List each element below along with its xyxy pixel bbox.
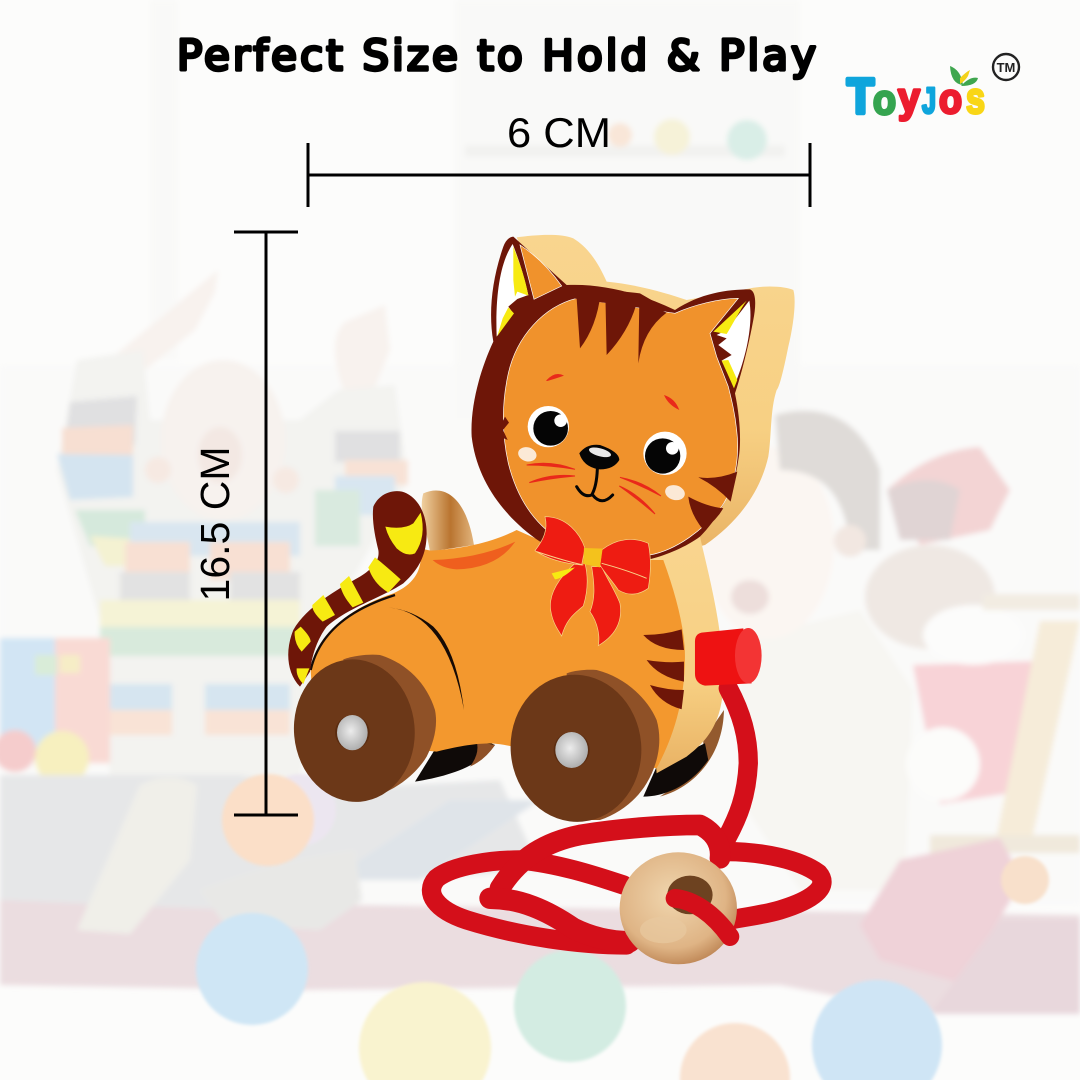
balls — [196, 774, 1049, 1080]
tail — [288, 491, 427, 687]
right ear — [717, 301, 750, 387]
brows — [546, 374, 564, 381]
red peg — [695, 628, 762, 686]
side stripes — [643, 629, 684, 709]
red cord — [431, 688, 822, 945]
nose and mouth — [577, 445, 619, 501]
cheek dots — [517, 445, 538, 463]
head — [471, 237, 755, 559]
dark head outline — [471, 237, 755, 559]
lower body details, bow, tail, wheels — [288, 491, 684, 827]
right cheek stripes — [698, 472, 737, 502]
height dimension: 16.5 CM: 16.5 CM — [192, 447, 238, 601]
width dimension: 6 CM: 6 CM — [507, 109, 611, 156]
trademark badge — [993, 54, 1019, 80]
far wheels and hump behind body — [415, 491, 724, 797]
height dimension: 16.5 CM — [192, 232, 298, 815]
trademark badge: TM — [997, 60, 1015, 75]
wooden bead on cord — [620, 852, 737, 964]
plush toys and wooden frame — [865, 447, 1080, 853]
toy: wooden cat pull-along — [288, 235, 822, 964]
eyes — [528, 406, 687, 475]
logo: Toyjos: s — [966, 74, 985, 123]
logo: Toyjos: o — [939, 75, 962, 122]
cream wood back of cat — [517, 235, 795, 557]
sweater sleeves and torso — [57, 350, 408, 780]
width dimension: 6 CM — [308, 109, 810, 207]
front wheel — [504, 669, 659, 827]
left cheek marks — [500, 417, 509, 440]
legs and carpet — [0, 775, 1080, 1014]
back mark — [433, 542, 515, 569]
logo: Toyjos: T — [847, 70, 874, 124]
body — [311, 530, 685, 768]
raised hands — [115, 270, 218, 370]
icon: logo leaves — [950, 66, 978, 86]
logo: Toyjos: y — [898, 74, 921, 121]
head stripes — [573, 288, 673, 363]
bow — [535, 517, 650, 646]
rear wheel — [288, 654, 436, 807]
head — [161, 360, 285, 520]
blocks left — [0, 638, 110, 785]
logo: Toyjos: J — [922, 80, 936, 121]
baby on left — [57, 270, 408, 780]
whiskers — [527, 463, 661, 514]
toddler on right — [702, 411, 913, 890]
title: Perfect Size to Hold & Play — [177, 31, 816, 80]
left ear — [520, 245, 562, 299]
haunch line — [388, 607, 464, 710]
face — [503, 298, 738, 556]
logo: Toyjos — [847, 66, 985, 124]
logo: Toyjos: o — [873, 76, 896, 123]
